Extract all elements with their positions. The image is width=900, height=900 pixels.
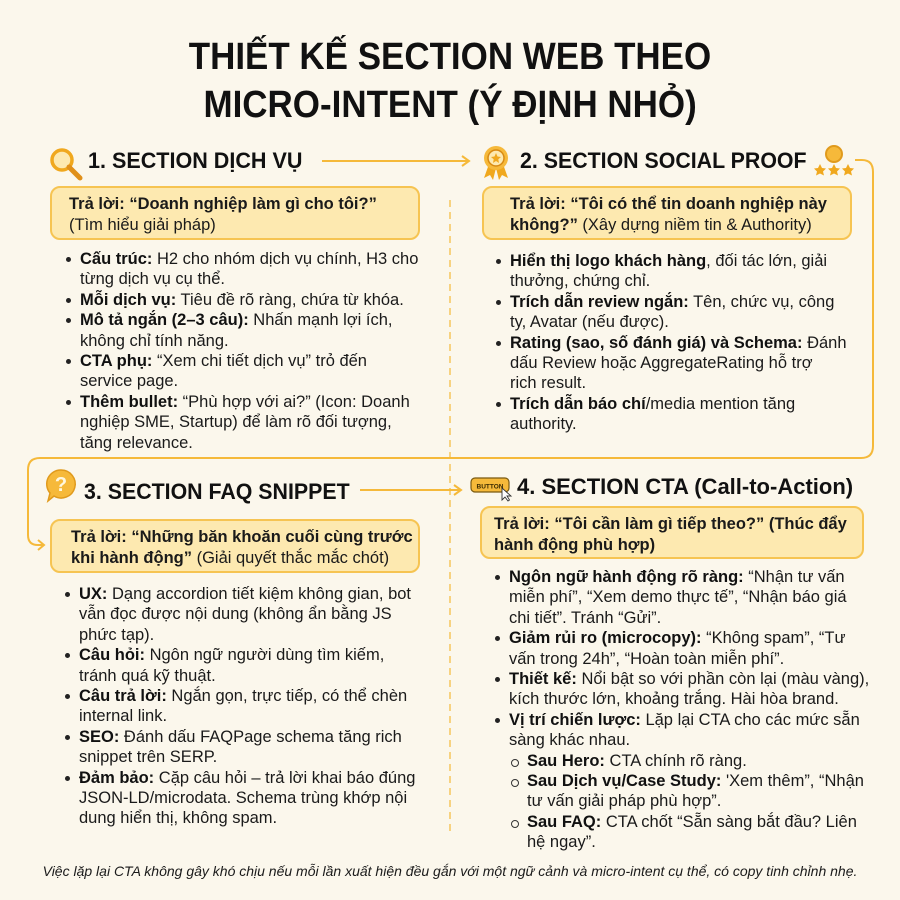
panel: section 4: [470, 474, 869, 851]
callout box: Trả lời: “Những băn khoăn cuối cùng trước: [71, 528, 413, 546]
callout box: không?” (Xây dựng niềm tin & Authority): [510, 216, 812, 234]
bullet list: nghiệp SME, Startup) để làm rõ đối tượng,: [80, 413, 392, 431]
bullet list: từng dịch vụ cụ thể.: [80, 270, 225, 288]
bullet list: thưởng, chứng chỉ.: [510, 272, 650, 290]
bullet list: không chỉ tính năng.: [80, 332, 229, 350]
bullet list: vẫn đọc được nội dung (không ẩn bằng JS: [79, 605, 392, 623]
callout box: [50, 186, 420, 240]
bullet list: dung hiển thị, không spam.: [79, 809, 277, 827]
bullet list: Mỗi dịch vụ: Tiêu đề rõ ràng, chứa từ khóa.: [80, 291, 404, 309]
panel: section 3: [46, 469, 420, 827]
bullet list: CTA phụ: “Xem chi tiết dịch vụ” trỏ đến: [80, 352, 367, 370]
callout box: hành động phù hợp): [494, 536, 655, 554]
bullet list: miễn phí”, “Xem demo thực tế”, “Nhận báo giá: [509, 588, 847, 606]
heading: 4. SECTION CTA (Call-to-Action): [517, 474, 853, 499]
bullet list: phức tạp).: [79, 626, 154, 644]
callout box: (Tìm hiểu giải pháp): [69, 216, 216, 234]
icon: button: [470, 477, 512, 502]
icon: magnifier: [50, 148, 82, 180]
bullet list: dấu Review hoặc AggregateRating hỗ trợ: [510, 354, 813, 372]
callout box: [480, 506, 864, 559]
bullet list: snippet trên SERP.: [79, 748, 217, 766]
bullet list: Thiết kế: Nổi bật so với phần còn lại (màu vàng),: [509, 670, 869, 688]
icon: sun with stars: [814, 145, 854, 176]
bullet list: Rating (sao, số đánh giá) và Schema: Đánh: [510, 334, 847, 352]
bullet list: tăng relevance.: [80, 434, 193, 452]
bullet list: Đảm bảo: Cặp câu hỏi – trả lời khai báo đúng: [79, 769, 415, 787]
bullet list: Vị trí chiến lược: Lặp lại CTA cho các mức sẵn: [509, 711, 860, 729]
callout box: khi hành động” (Giải quyết thắc mắc chót): [71, 549, 389, 567]
heading: 1. SECTION DỊCH VỤ: [88, 148, 302, 173]
bullet list: sàng khác nhau.: [509, 731, 630, 749]
panel: section 1: [50, 148, 420, 452]
callout box: Trả lời: “Tôi cần làm gì tiếp theo?” (Thúc đẩy: [494, 515, 847, 533]
bullet list: [496, 252, 847, 433]
panel: section 2: [482, 145, 854, 433]
title: MICRO-INTENT (Ý ĐỊNH NHỎ): [203, 84, 697, 126]
heading: 2. SECTION SOCIAL PROOF: [520, 148, 807, 173]
bullet list: tránh quá kỹ thuật.: [79, 667, 216, 685]
bullet list: Thêm bullet: “Phù hợp với ai?” (Icon: Doanh: [80, 393, 410, 411]
bullet list: rich result.: [510, 374, 586, 392]
heading: 3. SECTION FAQ SNIPPET: [84, 479, 350, 504]
footer note: Việc lặp lại CTA không gây khó chịu nếu mỗi lần xuất hiện đều gắn với một ngữ cảnh và micro-intent cụ thể, có copy tinh chỉnh nhẹ.: [43, 863, 857, 879]
icon: question bubble: [46, 469, 76, 503]
bullet list: Sau FAQ: CTA chốt “Sẵn sàng bắt đầu? Liên: [527, 813, 857, 831]
title: THIẾT KẾ SECTION WEB THEO: [189, 36, 711, 78]
bullet list: [66, 250, 418, 452]
bullet list: Ngôn ngữ hành động rõ ràng: “Nhận tư vấn: [509, 568, 845, 586]
bullet list: UX: Dạng accordion tiết kiệm không gian, bot: [79, 585, 411, 603]
bullet list: [495, 568, 869, 851]
bullet list: hệ ngay”.: [527, 833, 596, 851]
title: [189, 35, 711, 126]
callout box: Trả lời: “Doanh nghiệp làm gì cho tôi?”: [69, 195, 377, 213]
bullet list: Trích dẫn review ngắn: Tên, chức vụ, công: [510, 293, 834, 311]
bullet list: service page.: [80, 372, 178, 390]
bullet list: authority.: [510, 415, 577, 433]
bullet list: Giảm rủi ro (microcopy): “Không spam”, “Tư: [509, 629, 846, 647]
icon: award badge: [484, 146, 508, 180]
bullet list: vấn trong 24h”, “Hoàn toàn miễn phí”.: [509, 650, 784, 668]
bullet list: Câu trả lời: Ngắn gọn, trực tiếp, có thể chèn: [79, 687, 407, 705]
callout box: Trả lời: “Tôi có thể tin doanh nghiệp này: [510, 195, 827, 213]
callout box: [482, 186, 852, 240]
bullet list: Sau Hero: CTA chính rõ ràng.: [527, 752, 747, 770]
bullet list: JSON-LD/microdata. Schema trùng khớp nội: [79, 789, 407, 807]
bullet list: kích thước lớn, khoảng trắng. Hài hòa brand.: [509, 690, 839, 708]
icon: question bubble: ?: [55, 474, 67, 496]
bullet list: Trích dẫn báo chí/media mention tăng: [510, 395, 795, 413]
bullet list: [65, 585, 415, 827]
bullet list: internal link.: [79, 707, 167, 725]
bullet list: Mô tả ngắn (2–3 câu): Nhấn mạnh lợi ích,: [80, 311, 393, 329]
bullet list: chi tiết”. Tránh “Gửi”.: [509, 609, 661, 627]
bullet list: tư vấn giải pháp phù hợp”.: [527, 792, 721, 810]
bullet list: Sau Dịch vụ/Case Study: 'Xem thêm”, “Nhận: [527, 772, 864, 790]
bullet list: Câu hỏi: Ngôn ngữ người dùng tìm kiếm,: [79, 646, 384, 664]
bullet list: Hiển thị logo khách hàng, đối tác lớn, giải: [510, 252, 827, 270]
callout box: [50, 519, 420, 573]
icon: button: BUTTON: [477, 484, 504, 490]
bullet list: ty, Avatar (nếu được).: [510, 313, 669, 331]
bullet list: SEO: Đánh dấu FAQPage schema tăng rich: [79, 728, 402, 746]
bullet list: Cấu trúc: H2 cho nhóm dịch vụ chính, H3 cho: [80, 250, 418, 268]
